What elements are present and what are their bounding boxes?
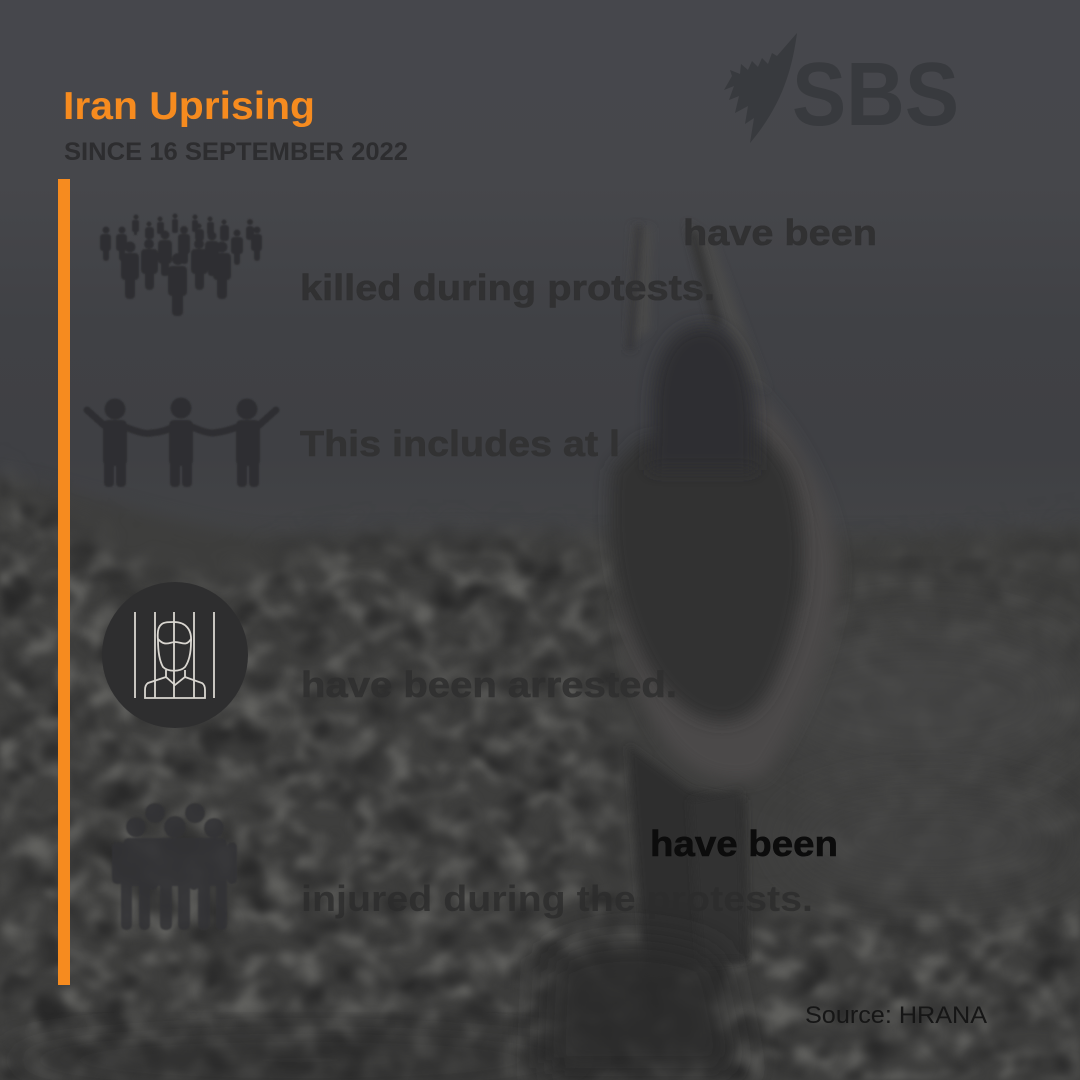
crowd caption text: killed during protests.	[300, 267, 715, 308]
SBS logo	[724, 33, 959, 145]
foreground dark mass	[540, 936, 745, 1080]
source: Source: HRANA	[805, 1002, 987, 1029]
injured text: injured during the protests.	[301, 878, 813, 919]
icon: crowd of people	[100, 214, 262, 316]
crowd caption text: have been	[683, 212, 877, 253]
text: children count line: This includes at l	[300, 423, 620, 464]
icon: group of injured people	[112, 803, 237, 930]
injured text	[301, 823, 838, 919]
legs	[628, 745, 748, 975]
orange vertical bar	[58, 179, 70, 985]
crowd caption text	[300, 212, 877, 308]
injured text: have been	[650, 823, 838, 864]
body	[610, 426, 804, 722]
title: Iran Uprising	[63, 85, 315, 128]
SBS logo: SBS	[792, 45, 959, 145]
subtitle: SINCE 16 SEPTEMBER 2022	[64, 138, 408, 166]
protester figure	[540, 222, 838, 1080]
scarf edge	[620, 385, 838, 780]
icon: three people holding hands	[87, 398, 276, 487]
background photo: blurred protester above crowd	[0, 226, 1080, 1080]
arrested text: have been arrested.	[301, 664, 677, 705]
icon: prisoner behind bars	[102, 582, 248, 728]
head	[650, 325, 755, 470]
raised arms	[628, 225, 652, 345]
